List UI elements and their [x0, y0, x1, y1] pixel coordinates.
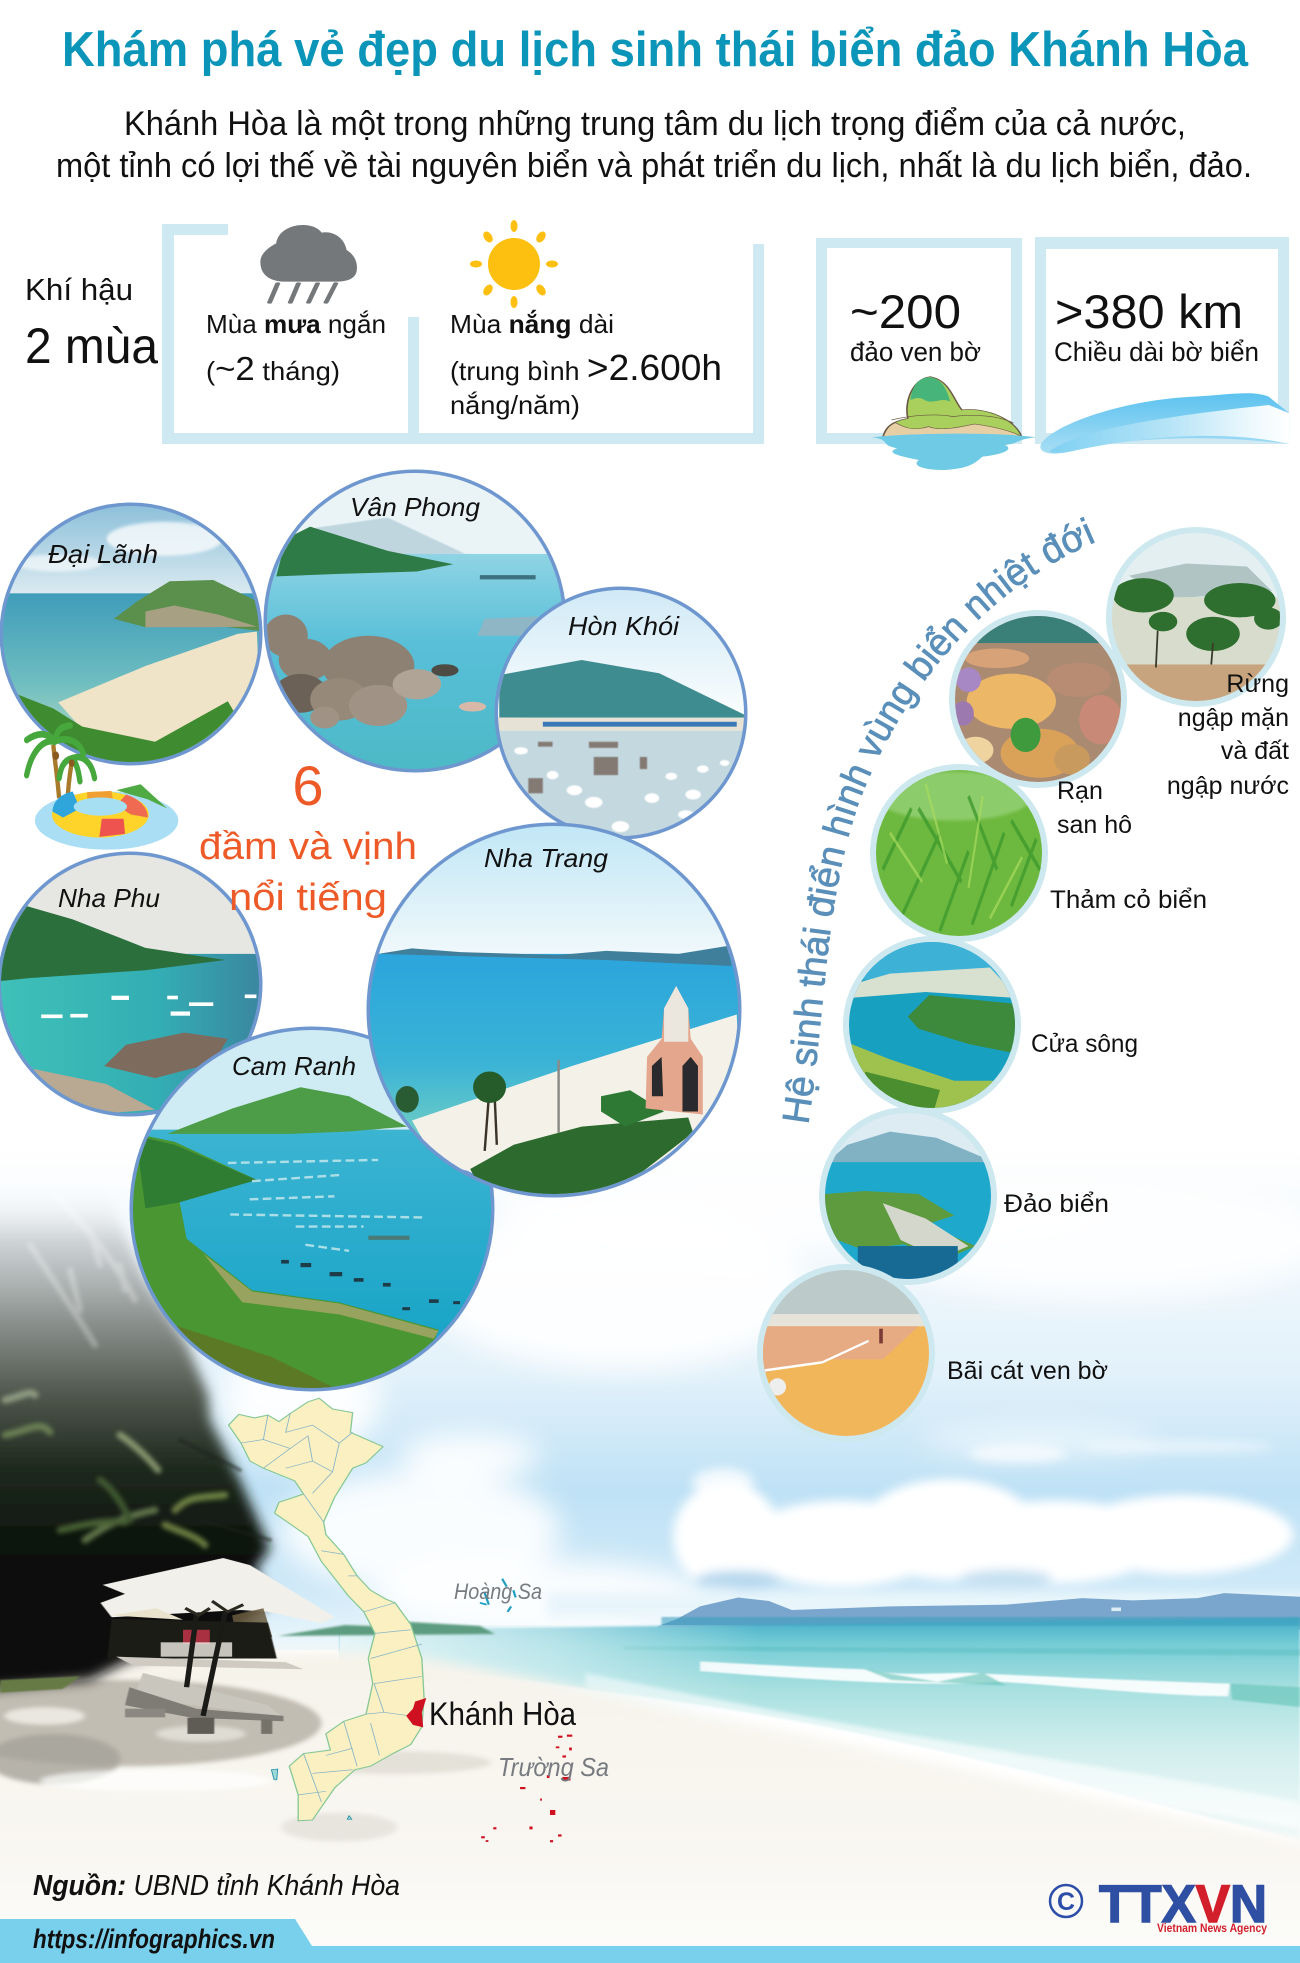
photo: estuary [844, 937, 1018, 1114]
place labels: Nha Phu [58, 883, 160, 913]
photo: coral [951, 606, 1126, 790]
map Khánh Hòa province [406, 1698, 426, 1727]
mid island [278, 1622, 495, 1636]
panel: islands [816, 238, 1036, 470]
photo: sand beach [754, 1264, 936, 1443]
photo: Cam Ranh [126, 1024, 499, 1396]
photo: island [819, 1108, 993, 1289]
Hoàng Sa label: Hoàng Sa [454, 1579, 542, 1604]
footer band [0, 1919, 1300, 1963]
photo: Hòn Khói [494, 584, 751, 846]
sun season text: nắng/năm) [450, 390, 580, 420]
climate frame [162, 224, 764, 444]
ecosystem labels: Đảo biển [1004, 1190, 1109, 1218]
intro text: một tỉnh có lợi thế về tài nguyên biển và phát triển du lịch, nhất là du lịch biển, đảo. [56, 147, 1252, 185]
ecosystem labels: Bãi cát ven bờ [947, 1357, 1108, 1385]
rain season text: Mùa mưa ngắn [206, 309, 386, 339]
rain season text: (~2 tháng) [206, 350, 340, 387]
photo: Đại Lãnh [0, 496, 262, 769]
ecosystem labels: và đất [1221, 737, 1289, 765]
background sky [0, 1150, 1300, 1650]
icon: island [872, 377, 1036, 470]
Hoàng Sa islands [480, 1579, 516, 1612]
coastline number: >380 km [1055, 285, 1243, 338]
agency tagline: Vietnam News Agency [1157, 1921, 1267, 1935]
sand shadows [0, 1680, 491, 1842]
copyright symbol [1050, 1885, 1082, 1917]
islands frame [816, 238, 1022, 444]
Phú Quốc and Côn Đảo [271, 1769, 352, 1819]
map land [229, 1398, 572, 1842]
photo: Nha Trang [364, 821, 746, 1202]
lagoon count heading [199, 754, 417, 919]
distant mountains [658, 1593, 1300, 1630]
climate heading: Khí hậu [25, 272, 133, 307]
sun season text: Mùa nắng dài [450, 309, 614, 339]
sun season text: (trung bình >2.600h [450, 347, 722, 388]
logo: TTXVN [1050, 1875, 1267, 1935]
photo: Vân Phong [262, 460, 572, 778]
background clouds [220, 1170, 1300, 1640]
intro text [56, 105, 1252, 185]
ecosystem labels: Cửa sông [1031, 1030, 1138, 1058]
intro text: Khánh Hòa là một trong những trung tâm du lịch trọng điểm của cả nước, [124, 105, 1186, 143]
palm mass [0, 1180, 270, 1690]
ecosystem labels: Rừng [1226, 670, 1289, 698]
agency letters: TTXVN [1099, 1875, 1267, 1934]
Trường Sa islands [481, 1735, 572, 1842]
panel: climate [25, 220, 764, 444]
ecosystem labels: san hô [1057, 811, 1132, 839]
ecosystem labels: Thảm cỏ biển [1050, 886, 1207, 914]
lounger chairs [116, 1657, 304, 1734]
map of Vietnam [229, 1398, 609, 1842]
umbrellas [0, 1558, 335, 1734]
Khánh Hòa label: Khánh Hòa [429, 1696, 576, 1732]
place labels [48, 492, 680, 1081]
islands label: đảo ven bờ [850, 337, 981, 367]
palm trees and umbrellas [0, 1180, 495, 1842]
place labels: Cam Ranh [232, 1051, 356, 1081]
place labels: Vân Phong [350, 492, 481, 522]
place labels: Hòn Khói [568, 611, 680, 641]
place labels: Đại Lãnh [48, 539, 158, 569]
ecosystem labels: Rạn [1057, 777, 1103, 805]
sea left fade [340, 1625, 760, 1725]
waves [585, 1617, 1300, 1829]
map province lines [241, 1414, 422, 1802]
icon: wave [1040, 393, 1289, 454]
islands number: ~200 [850, 285, 961, 338]
sun season text [450, 309, 722, 420]
ecosystem labels: ngập nước [1167, 772, 1289, 800]
palm fronds [5, 1195, 270, 1545]
Trường Sa label: Trường Sa [498, 1752, 609, 1782]
icon: rain cloud [260, 225, 357, 303]
sea [340, 1618, 1300, 1840]
coastline frame [1035, 237, 1289, 444]
lagoon count heading: 6 [292, 754, 324, 817]
photo: Nha Phu [0, 848, 262, 1118]
sand [0, 1652, 1300, 1963]
photo: mangrove [1104, 527, 1290, 707]
icon: sun [470, 220, 558, 308]
panel: coastline [1035, 237, 1289, 454]
climate heading [25, 272, 158, 374]
lagoon count heading: đầm và vịnh [199, 826, 417, 868]
ecosystem labels: ngập mặn [1178, 704, 1289, 732]
island water [872, 434, 1036, 470]
source: Nguồn: UBND tỉnh Khánh Hòa [33, 1870, 400, 1902]
big cumulus cloud [547, 1440, 1300, 1617]
coastline label: Chiều dài bờ biển [1054, 337, 1259, 367]
icon: palm and swim ring [27, 725, 178, 850]
footer url: https://infographics.vn [33, 1924, 275, 1954]
lagoon count heading: nổi tiếng [229, 877, 387, 919]
panel: 6 lagoons and bays [0, 460, 751, 1396]
panel: tropical marine ecosystems [757, 516, 1289, 1442]
rain season text [206, 309, 386, 387]
curved heading: Hệ sinh thái điển hình vùng biển nhiệt đới [782, 516, 1095, 1122]
place labels: Nha Trang [484, 843, 609, 873]
photo: seagrass [872, 765, 1047, 943]
ecosystem labels [947, 670, 1289, 1385]
copyright symbol: C [1057, 1888, 1075, 1916]
umbrella poles [187, 1612, 225, 1716]
climate heading: 2 mùa [25, 318, 158, 374]
